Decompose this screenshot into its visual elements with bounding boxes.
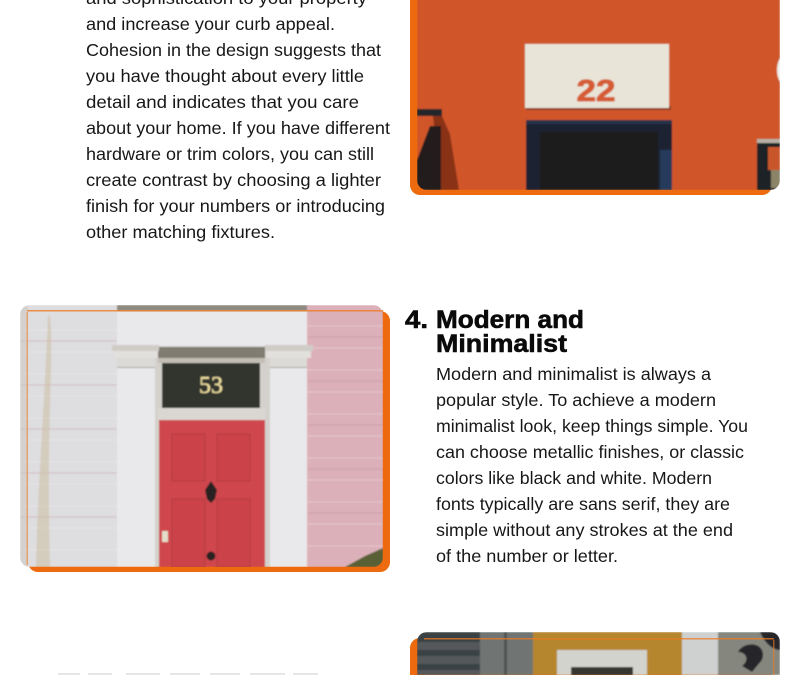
text block: modern and minimalist description: can choose metallic finishes, or classic (436, 442, 744, 462)
heading: Modern and Minimalist: Minimalist (436, 330, 568, 358)
text block: cohesive hardware advice: hardware or trim colors, you can still (86, 144, 374, 164)
text block: modern and minimalist description: popular style. To achieve a modern (436, 390, 716, 410)
photo panel: amber house with grey trim (410, 632, 780, 675)
text block: cohesive hardware advice: finish for your numbers or introducing (86, 196, 385, 216)
photo panel: white and pink brick wall with red door number 53 (20, 305, 390, 572)
house number 53: 53 (199, 373, 223, 399)
house number 22: 22 (576, 73, 616, 108)
text block: modern and minimalist description: simple without any strokes at the end (436, 520, 733, 540)
text block: cohesive hardware advice: you have thought about every little (86, 66, 364, 86)
text block: cohesive hardware advice: detail and indicates that you care (86, 92, 359, 112)
text block: cohesive hardware advice: Cohesion in the design suggests that (86, 40, 381, 60)
text block: modern and minimalist description: minimalist look, keep things simple. You (436, 416, 748, 436)
text block: modern and minimalist description: fonts typically are sans serif, they are (436, 494, 730, 514)
text block: modern and minimalist description: colors like black and white. Modern (436, 468, 712, 488)
right capital (265, 345, 313, 368)
text block: modern and minimalist description: Modern and minimalist is always a (436, 364, 711, 384)
text block: cohesive hardware advice: create contrast by choosing a lighter (86, 170, 381, 190)
cut-off text line at the page bottom (58, 673, 318, 675)
heading: Modern and Minimalist: Modern and (436, 306, 584, 334)
section number: 4. (405, 306, 428, 334)
photo panel: orange wall with house number 22 (410, 0, 793, 195)
text block: cohesive hardware advice: and increase your curb appeal. (86, 14, 335, 34)
text block: cohesive hardware advice: other matching fixtures. (86, 222, 275, 242)
text block: cohesive hardware advice (86, 0, 390, 242)
text block: modern and minimalist description (436, 364, 748, 566)
heading: Modern and Minimalist (436, 306, 584, 358)
text block: cohesive hardware advice: about your home. If you have different (86, 118, 390, 138)
left capital (112, 345, 159, 368)
red door (159, 420, 265, 567)
text block: modern and minimalist description: of the number or letter. (436, 546, 618, 566)
